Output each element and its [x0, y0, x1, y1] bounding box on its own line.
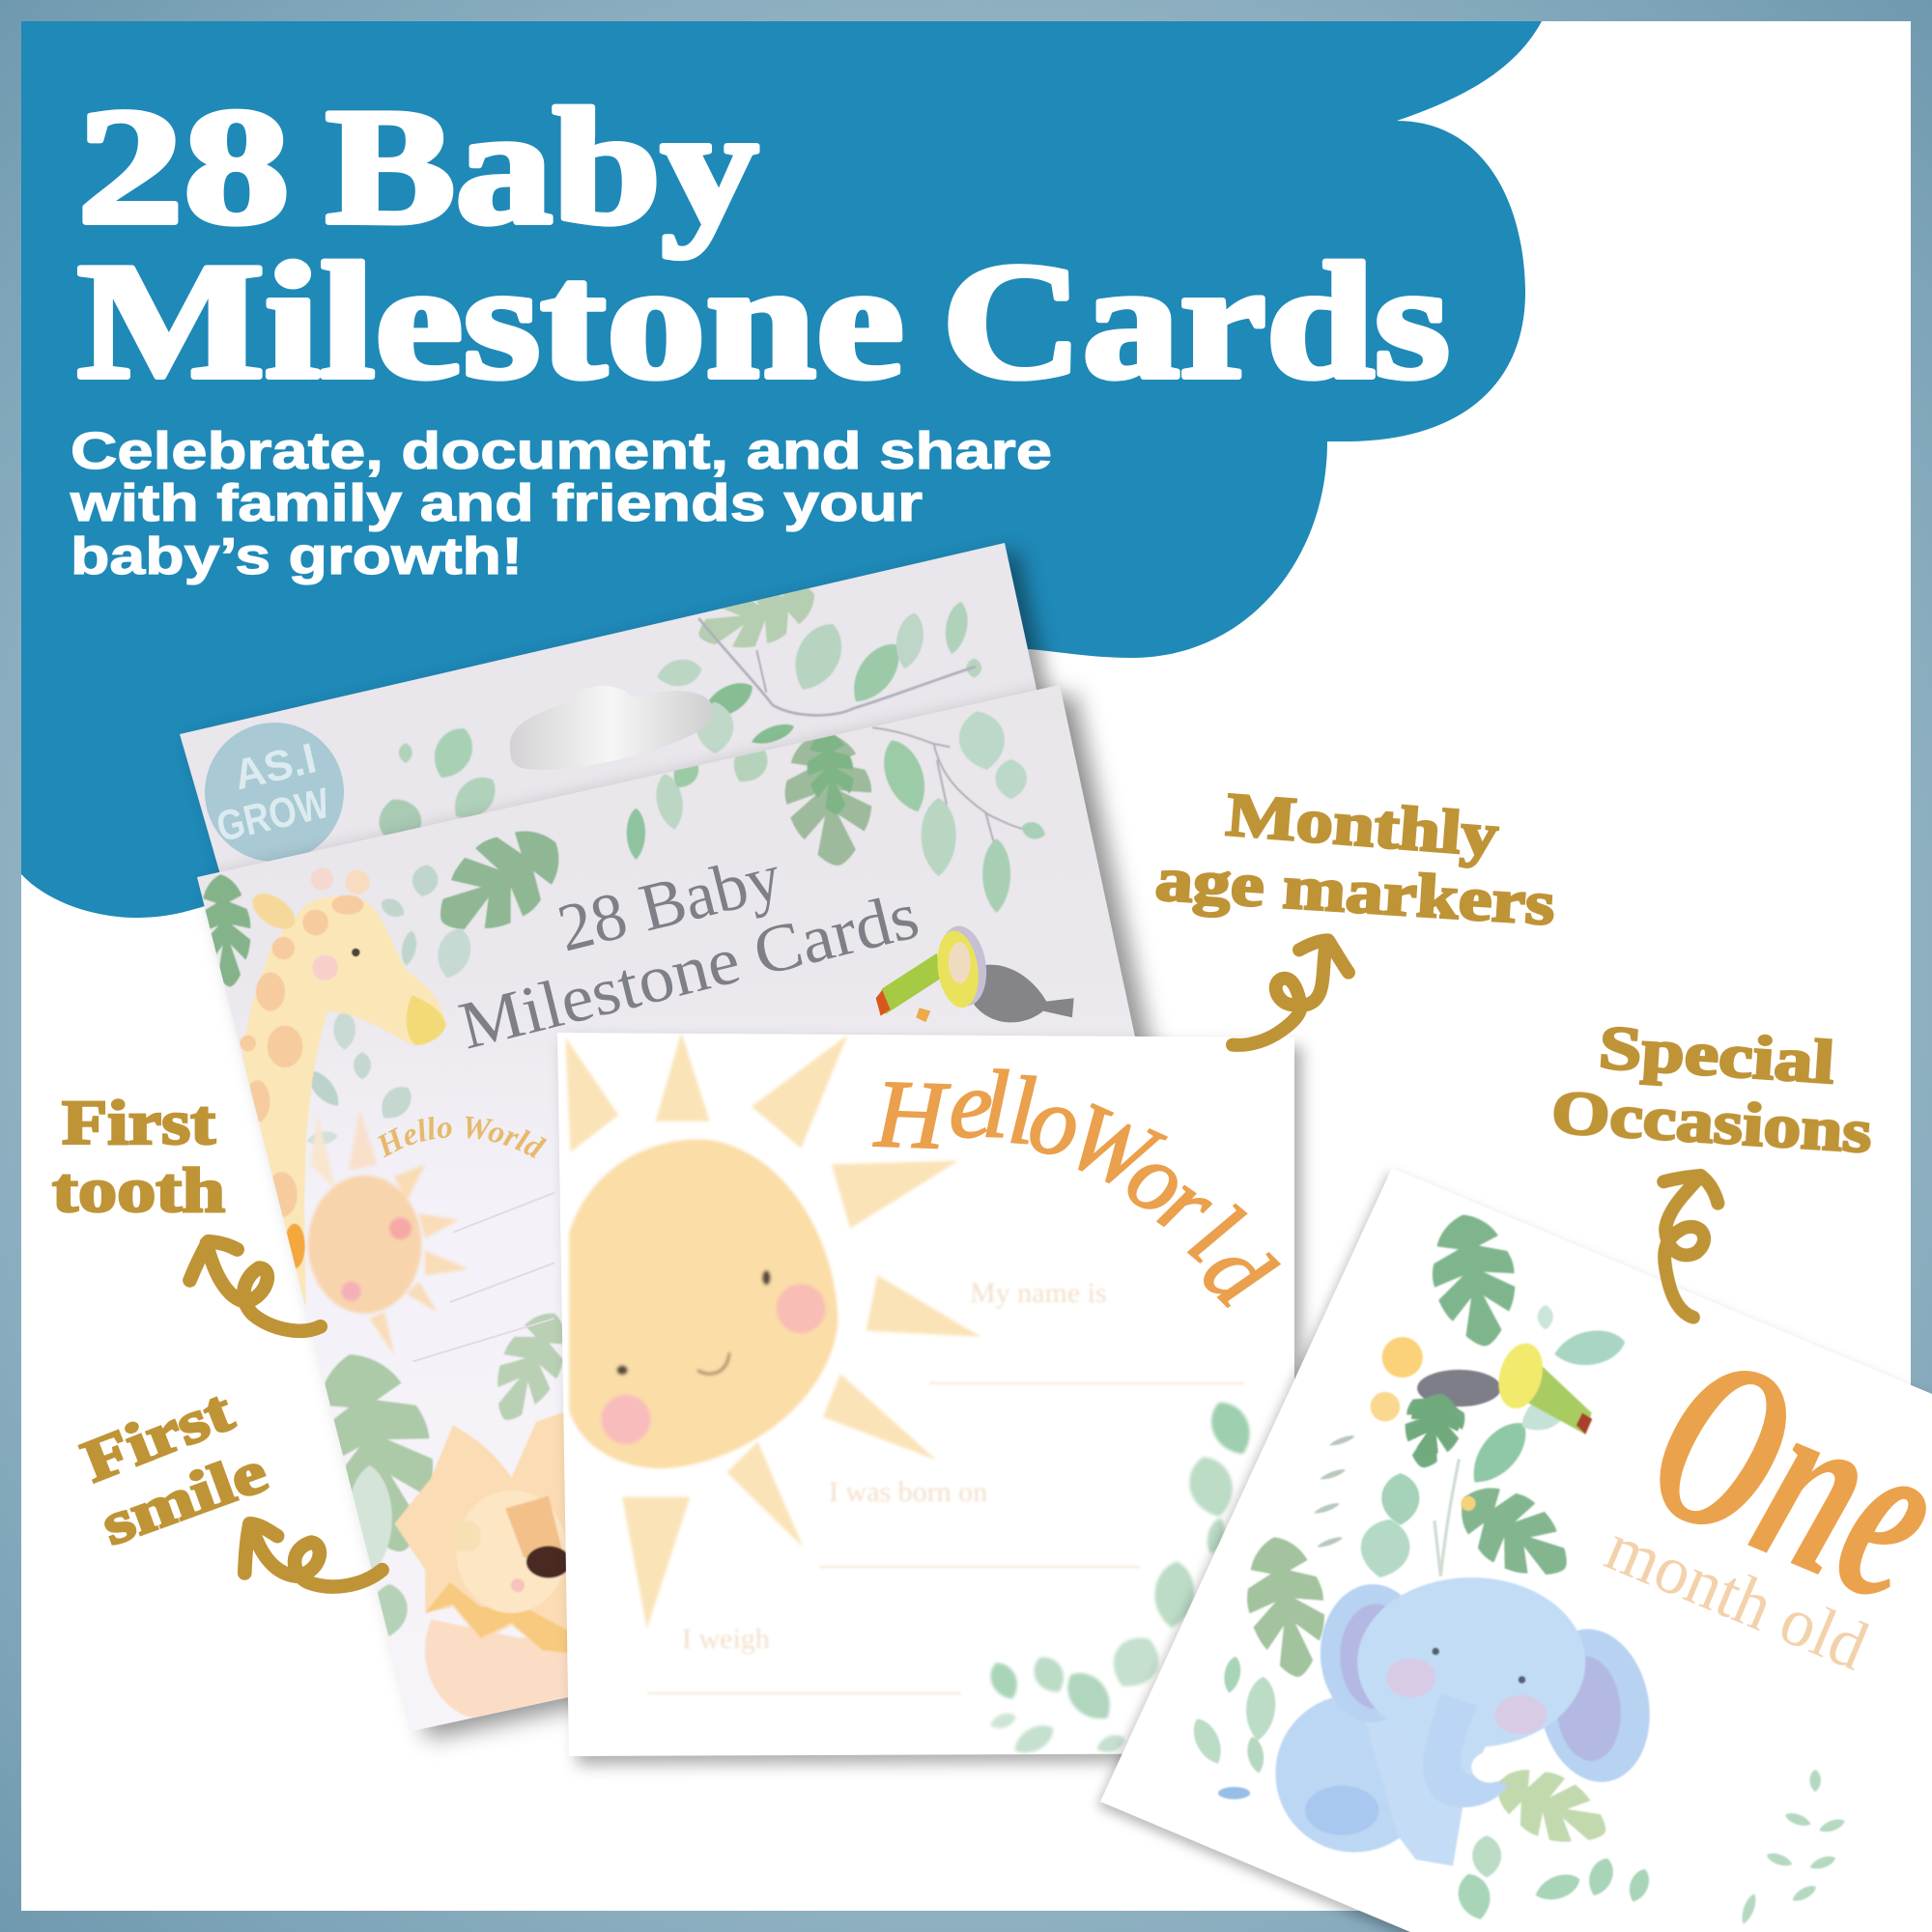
- pack title text: 28 Baby: [551, 839, 788, 967]
- hanger hole: [510, 686, 713, 770]
- callout: first tooth: tooth: [52, 1155, 225, 1226]
- callout: special occasions: Occasions: [1549, 1077, 1874, 1166]
- icon: AS I GROW badge: GROW: [213, 780, 334, 851]
- callout: first smile: First: [73, 1378, 242, 1495]
- icon: AS I GROW badge: AS.I: [230, 734, 321, 799]
- callout: first tooth: [52, 1088, 225, 1226]
- form fields: I weigh: [682, 1623, 770, 1655]
- form fields: My name is: [970, 1277, 1107, 1309]
- foliage on front pack, bottom: [325, 1312, 562, 1636]
- arrow: first tooth: [190, 1241, 321, 1331]
- leaves on hello card: [984, 1395, 1259, 1760]
- product: One month old card: [1100, 1168, 1932, 1932]
- subheading: month old: month old: [1596, 1508, 1879, 1685]
- callout: first smile: smile: [94, 1438, 275, 1558]
- arrow: monthly: [1233, 940, 1349, 1045]
- title: 28: [77, 75, 290, 259]
- arrow: first smile: [244, 1523, 383, 1586]
- product: back of pack with hanger: [180, 543, 1063, 872]
- hello world heading: Hello World: [871, 1050, 1293, 1327]
- pack title text: Milestone Cards: [452, 878, 925, 1065]
- illustration: giraffe: [240, 867, 446, 1304]
- blue cloud header shape: [21, 21, 1542, 918]
- illustration: mini hello world card: [306, 1111, 554, 1362]
- product: front of pack: [197, 680, 1165, 1750]
- callout: special occasions: Special: [1597, 1012, 1836, 1096]
- subtitle: Celebrate, document, and share: [71, 422, 1052, 480]
- callout: first smile: [73, 1378, 275, 1558]
- title: Milestone: [77, 230, 904, 413]
- illustration: sun: [565, 1033, 980, 1629]
- subtitle: [70, 422, 1052, 585]
- title: Cards: [942, 230, 1450, 413]
- subtitle: baby’s growth!: [71, 527, 523, 585]
- foliage on front pack, right: [627, 707, 1048, 913]
- subtitle: with family and friends your: [70, 474, 923, 532]
- form fields: [647, 1277, 1244, 1693]
- form fields: I was born on: [829, 1476, 987, 1508]
- callout: monthly age markers: [1153, 780, 1557, 938]
- illustration: mini hello world card: Hello World: [377, 1117, 547, 1159]
- product: Hello World card: [557, 1033, 1294, 1760]
- foliage on back pack, right: [657, 588, 981, 753]
- callout: monthly age markers: age markers: [1153, 844, 1557, 938]
- title: [77, 75, 1450, 413]
- callout: monthly age markers: Monthly: [1224, 780, 1501, 869]
- illustration: elephant: [1275, 1577, 1662, 1865]
- title: Baby: [326, 75, 758, 259]
- illustration: toucan on pack: [876, 923, 1074, 1022]
- icon: AS I GROW badge: [205, 723, 344, 862]
- arrow: special occasions: [1663, 1176, 1718, 1318]
- foliage on front pack, left: [203, 831, 559, 1144]
- leaves behind elephant: [1187, 1208, 1846, 1925]
- callout: first tooth: First: [62, 1088, 215, 1158]
- illustration: lion: [394, 1409, 571, 1718]
- illustration: toucan: [1371, 1337, 1592, 1511]
- callout: special occasions: [1549, 1012, 1874, 1166]
- foliage on back pack, left: [379, 728, 497, 836]
